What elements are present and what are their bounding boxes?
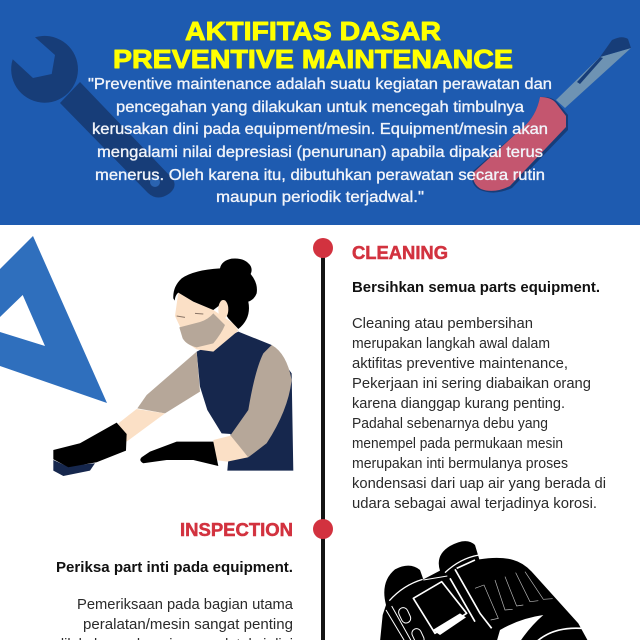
text block: cleaning: aktifitas preventive maintenance, [352, 355, 568, 372]
text block: cleaning: kondensasi dari uap air yang berada di [352, 475, 606, 492]
icon: wrench [11, 36, 175, 197]
text block: cleaning: karena dianggap kurang penting. [352, 395, 565, 412]
text block: cleaning [352, 315, 606, 512]
text block: cleaning: merupakan inti bermulanya proses [352, 455, 568, 472]
subheading: cleaning: Bersihkan semua parts equipment. [352, 280, 600, 296]
text block: inspection: Pemeriksaan pada bagian utama [77, 596, 294, 613]
illustration: woman cleaning [53, 258, 293, 476]
text block: cleaning: merupakan langkah awal dalam [352, 335, 550, 352]
intro text block: mengalami nilai depresiasi (penurunan) apabila dipakai terus [97, 144, 543, 161]
intro text block [88, 76, 552, 206]
timeline [313, 238, 333, 640]
title: AKTIFITAS DASAR [185, 16, 441, 46]
intro text block: "Preventive maintenance adalah suatu kegiatan perawatan dan [88, 76, 552, 93]
title [113, 16, 513, 74]
text block: cleaning: menempel pada permukaan mesin [352, 435, 563, 452]
subheading: inspection: Periksa part inti pada equipment. [56, 560, 293, 576]
icon: binoculars [380, 541, 588, 640]
heading: cleaning: CLEANING [352, 243, 448, 263]
text block: inspection: peralatan/mesin sangat penting [83, 616, 293, 633]
heading: inspection: INSPECTION [180, 520, 293, 540]
text block: cleaning: udara sebagai awal terjadinya korosi. [352, 495, 597, 512]
panel: header background [0, 0, 640, 225]
text block: inspection [56, 596, 294, 640]
intro text block: menerus. Oleh karena itu, dibutuhkan perawatan secara rutin [95, 167, 545, 184]
icon: blue set square [0, 236, 107, 403]
text block: cleaning: Padahal sebenarnya debu yang [352, 415, 548, 432]
text block: cleaning: Pekerjaan ini sering diabaikan orang [352, 375, 591, 392]
icon: screwdriver [472, 37, 631, 193]
text block: cleaning: Cleaning atau pembersihan [352, 315, 533, 332]
intro text block: maupun periodik terjadwal." [216, 189, 424, 206]
intro text block: kerusakan dini pada equipment/mesin. Equipment/mesin akan [92, 121, 548, 138]
intro text block: pencegahan yang dilakukan untuk mencegah timbulnya [116, 99, 524, 116]
title: PREVENTIVE MAINTENANCE [113, 44, 513, 74]
